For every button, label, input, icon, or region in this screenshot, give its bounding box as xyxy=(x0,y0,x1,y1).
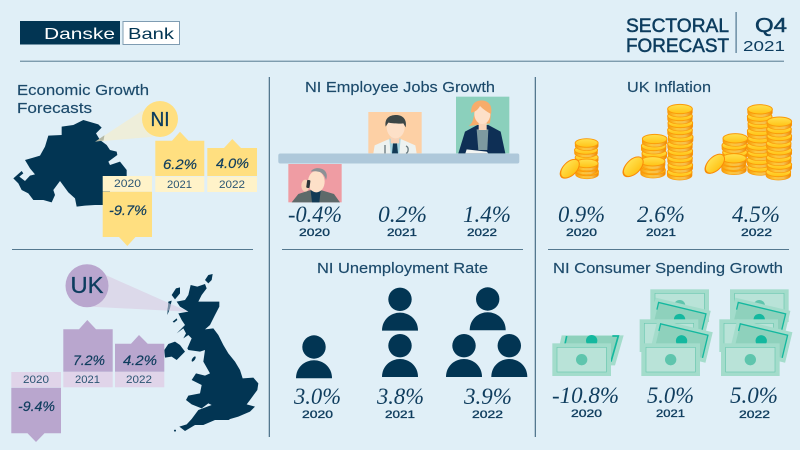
NI bar 2021 xyxy=(155,132,204,192)
icon: doctor 2021 xyxy=(368,112,422,153)
value: inflation 2022: 4.5% xyxy=(732,202,780,227)
callout tip: UK xyxy=(168,303,188,312)
value: spending 2022: 2022 xyxy=(739,409,770,421)
panel: NI employee jobs growth xyxy=(278,79,519,239)
value: inflation 2021: 2021 xyxy=(646,227,676,239)
header: sectoral forecast Q4 2021: FORECAST xyxy=(626,36,729,57)
value: spending 2021: 5.0% xyxy=(647,383,694,408)
NI bar 2021: 6.2% xyxy=(163,156,197,172)
panel: UK inflation xyxy=(556,79,792,239)
icon: people 2020 xyxy=(296,335,332,378)
icon: businessman on phone 2020 xyxy=(288,164,342,202)
badge: NI: NI xyxy=(150,109,170,131)
panel: NI consumer spending growth xyxy=(552,260,792,421)
NI bar 2022: 2022 xyxy=(219,179,245,191)
value: unemployment 2021: 2021 xyxy=(385,409,415,421)
value: inflation 2020 xyxy=(558,202,605,239)
UK bar 2022: 4.2% xyxy=(123,352,157,368)
badge: UK xyxy=(66,264,108,307)
UK bar 2022 xyxy=(115,335,164,387)
value: jobs 2022 xyxy=(463,202,511,239)
heading: UK inflation: UK Inflation xyxy=(627,79,711,96)
header: sectoral forecast Q4 2021: Q4 xyxy=(755,15,787,37)
value: unemployment 2020: 3.0% xyxy=(293,384,341,409)
value: jobs 2021 xyxy=(378,202,427,239)
icon: coins 2021 xyxy=(619,104,693,181)
value: jobs 2020: -0.4% xyxy=(288,202,342,227)
header: sectoral forecast Q4 2021: SECTORAL xyxy=(626,16,729,37)
UK bar 2021: 2021 xyxy=(75,374,100,386)
value: spending 2022 xyxy=(730,383,778,421)
logo: Danske Bank: Bank xyxy=(128,26,175,43)
value: inflation 2022: 2022 xyxy=(741,227,772,239)
value: unemployment 2020 xyxy=(293,384,341,421)
UK bar 2020 xyxy=(11,372,61,442)
NI bar 2022: 4.0% xyxy=(216,155,249,171)
value: jobs 2021: 2021 xyxy=(387,227,417,239)
NI bar 2021: 2021 xyxy=(167,179,192,191)
value: unemployment 2021: 3.8% xyxy=(376,384,424,409)
icon: people 2022 xyxy=(446,287,527,377)
map: United Kingdom xyxy=(164,274,258,432)
UK bar 2020: 2020 xyxy=(23,374,49,386)
value: unemployment 2022: 2022 xyxy=(472,409,503,421)
callout cone: NI xyxy=(95,110,153,142)
bar: zero baseline xyxy=(278,154,519,164)
UK bar 2021 xyxy=(63,320,113,387)
icon: banknotes 2021 xyxy=(640,289,713,376)
callout cone: UK xyxy=(92,273,188,312)
badge: NI xyxy=(142,101,178,137)
value: spending 2020 xyxy=(552,383,619,420)
badge: UK: UK xyxy=(70,272,104,298)
map: Northern Ireland xyxy=(13,120,127,207)
logo: Danske Bank: Danske xyxy=(44,26,115,43)
value: inflation 2020: 2020 xyxy=(566,227,597,239)
icon: coins 2020 xyxy=(556,139,598,182)
icon: banknotes 2020 xyxy=(552,335,624,376)
NI bar 2020: -9.7% xyxy=(109,202,147,218)
value: inflation 2022 xyxy=(732,202,780,239)
value: inflation 2021: 2.6% xyxy=(637,202,685,227)
heading: NI consumer spending growth: NI Consumer Spending Growth xyxy=(553,260,783,277)
value: jobs 2022: 1.4% xyxy=(463,202,511,227)
value: inflation 2020: 0.9% xyxy=(558,202,605,227)
icon: people 2021 xyxy=(382,288,418,377)
heading: economic growth forecasts: Economic Growth xyxy=(17,82,149,99)
value: unemployment 2020: 2020 xyxy=(302,409,333,421)
NI bar 2022 xyxy=(207,139,257,192)
panel: NI unemployment rate xyxy=(293,260,527,421)
icon: banknotes 2022 xyxy=(719,289,792,376)
value: unemployment 2022 xyxy=(463,384,512,421)
value: unemployment 2022: 3.9% xyxy=(463,384,512,409)
value: jobs 2020 xyxy=(288,202,342,239)
icon: businesswoman 2022 xyxy=(456,97,509,153)
heading: NI employee jobs growth: NI Employee Jobs Growth xyxy=(305,79,495,96)
panel: economic growth forecasts NI: Forecasts xyxy=(17,100,92,117)
panel: economic growth forecasts NI xyxy=(13,82,257,246)
value: jobs 2021: 0.2% xyxy=(378,202,427,227)
callout tip: NI xyxy=(95,135,104,142)
value: inflation 2021 xyxy=(637,202,685,239)
value: jobs 2020: 2020 xyxy=(299,227,330,239)
UK bar 2021: 7.2% xyxy=(73,352,105,368)
panel: economic growth forecasts UK xyxy=(11,264,258,442)
header: sectoral forecast Q4 2021 xyxy=(626,12,787,57)
UK bar 2020: -9.4% xyxy=(18,398,55,414)
heading: NI unemployment rate: NI Unemployment Rate xyxy=(317,260,488,277)
header: sectoral forecast Q4 2021: 2021 xyxy=(743,38,785,55)
value: spending 2022: 5.0% xyxy=(730,383,778,408)
NI bar 2020 xyxy=(103,176,152,246)
UK bar 2022: 2022 xyxy=(126,374,152,386)
value: unemployment 2021 xyxy=(376,384,424,421)
value: spending 2020: -10.8% xyxy=(552,383,619,408)
value: spending 2020: 2020 xyxy=(571,408,602,420)
logo: Danske Bank xyxy=(20,21,180,44)
NI bar 2020: 2020 xyxy=(114,178,141,190)
value: spending 2021: 2021 xyxy=(656,408,685,420)
icon: coins 2022 xyxy=(701,105,792,180)
value: jobs 2022: 2022 xyxy=(467,227,497,239)
value: spending 2021 xyxy=(647,383,694,420)
